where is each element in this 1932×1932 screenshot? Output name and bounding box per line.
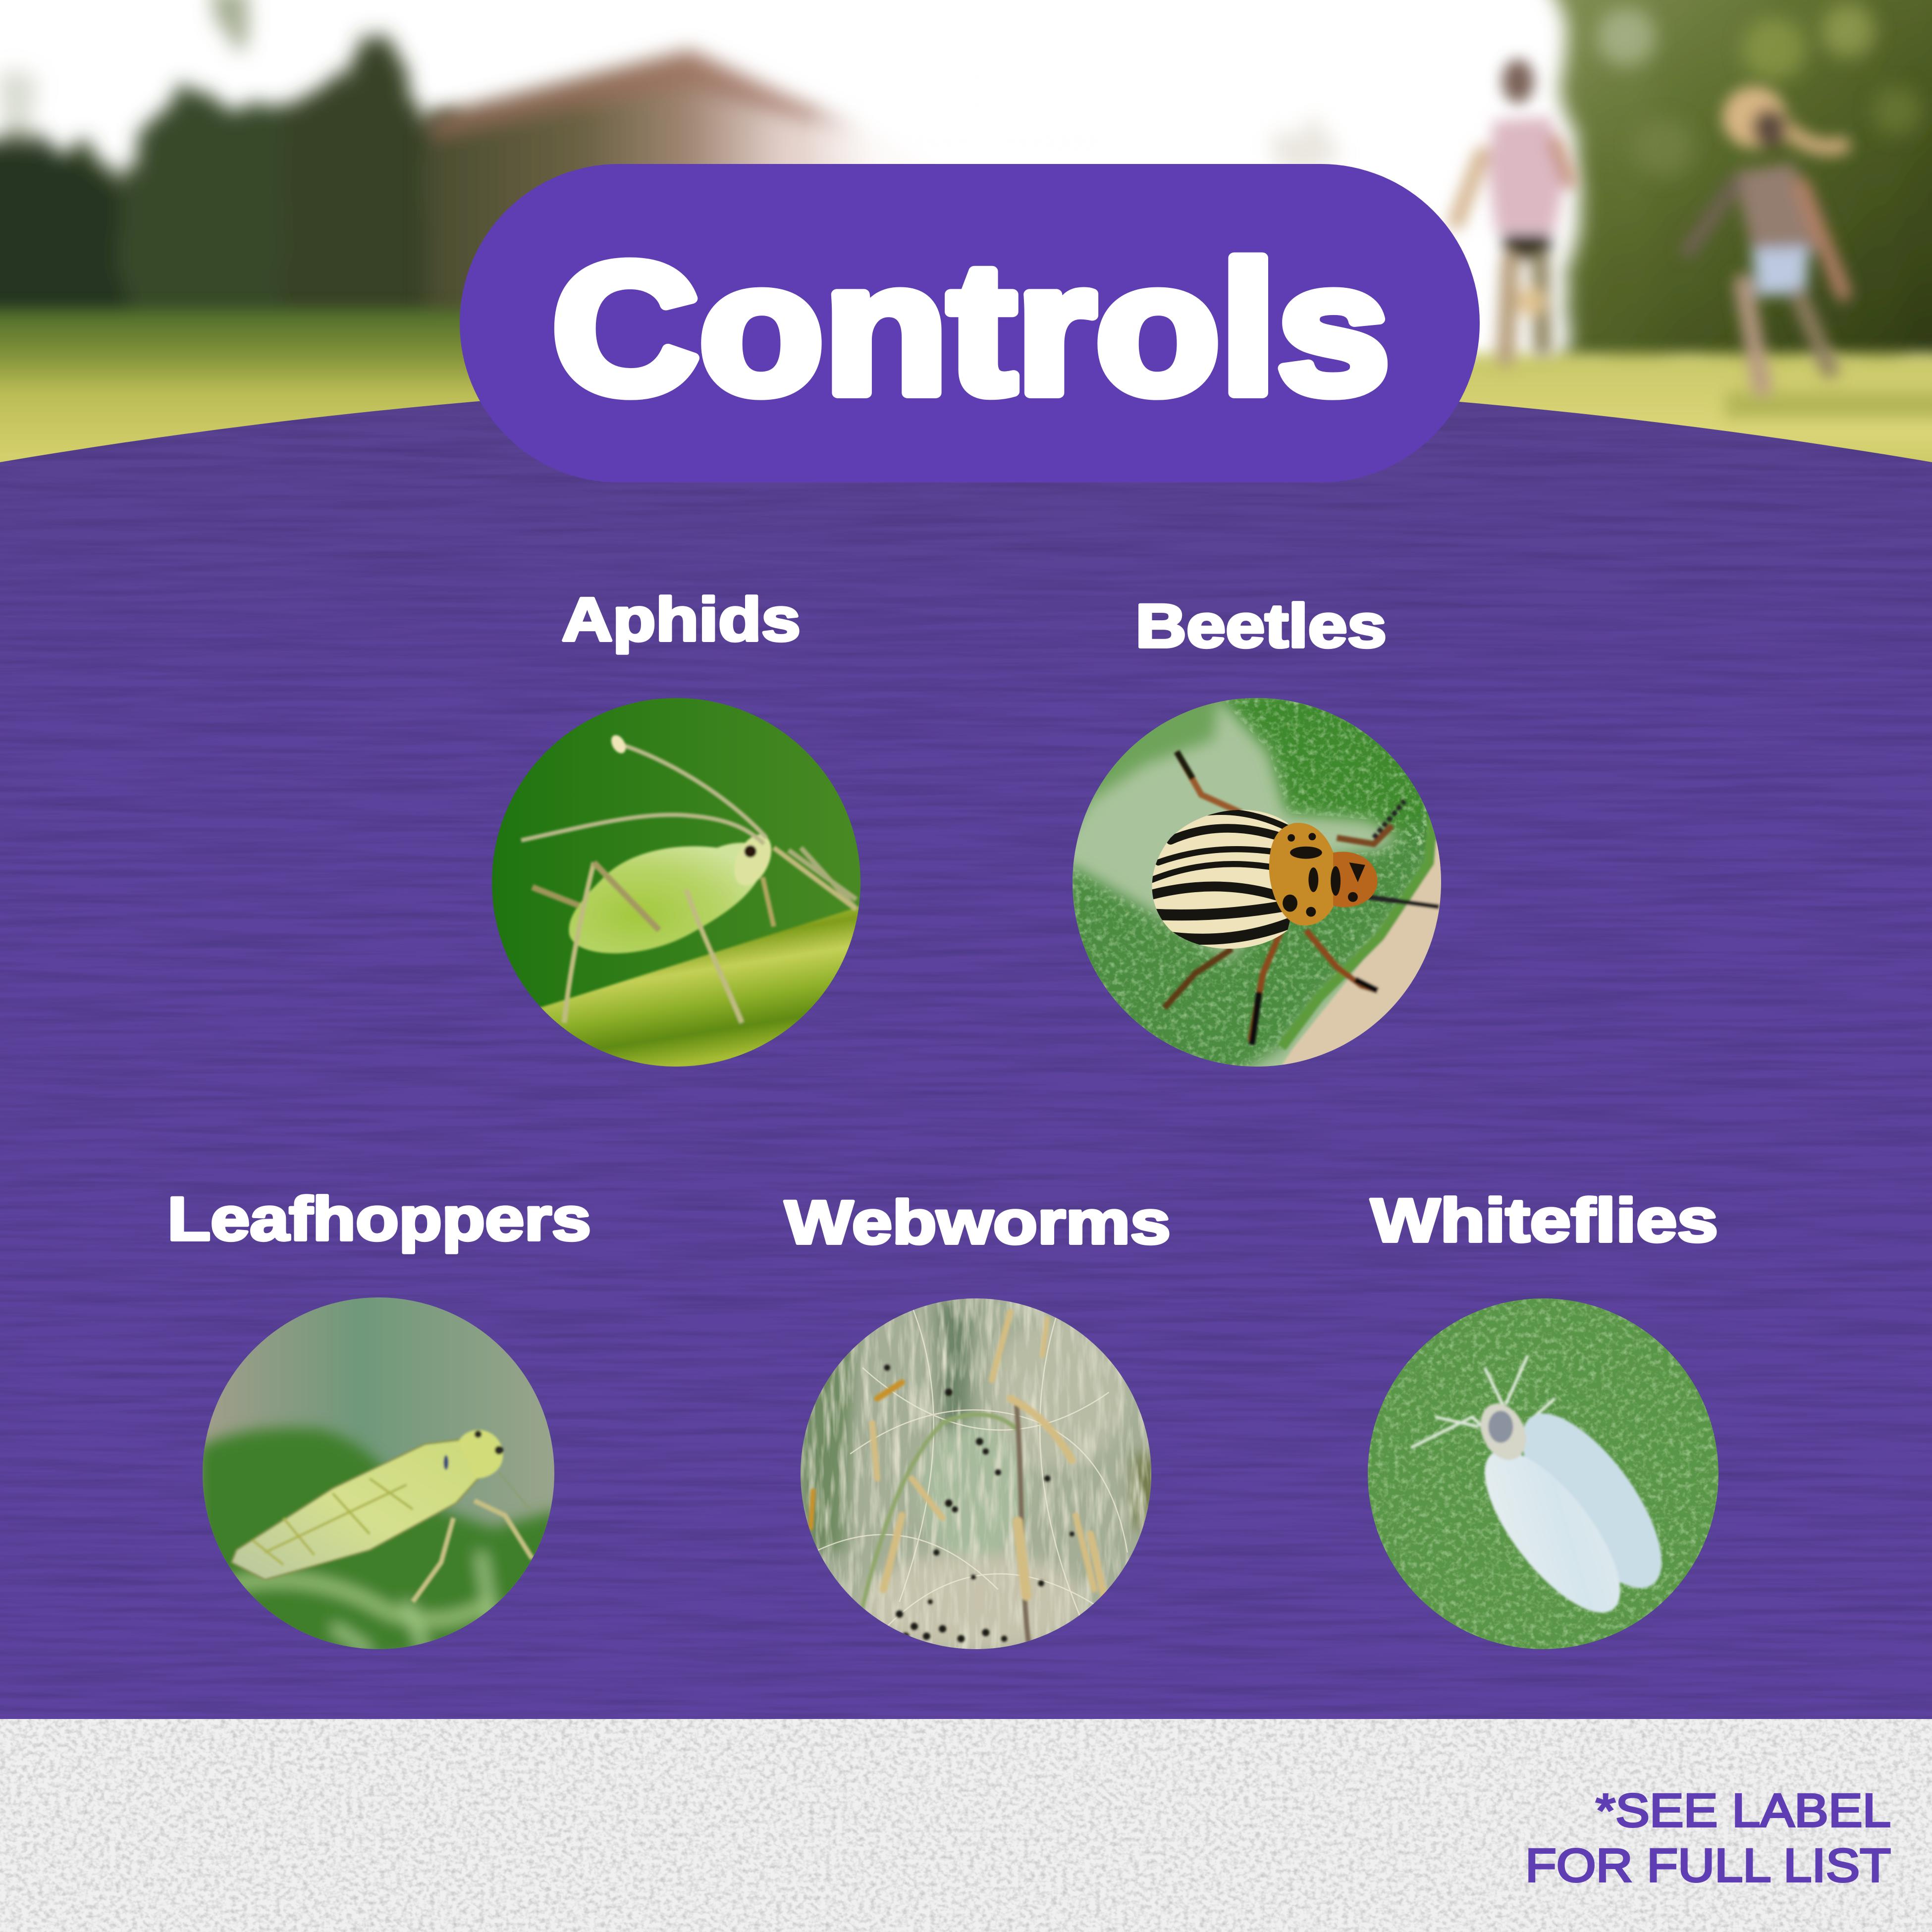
label: Aphids: Aphids [562, 586, 801, 654]
child 2 [1688, 86, 1843, 388]
label: Leafhoppers: Leafhoppers [167, 1185, 591, 1253]
purple wood-textured panel [0, 380, 1932, 1719]
footnote line 1: *SEE LABEL [1596, 1784, 1891, 1837]
label: Whiteflies: Whiteflies [1371, 1186, 1718, 1255]
photo: leafhopper [197, 1294, 561, 1657]
photo: colorado beetle [1073, 698, 1441, 1067]
title pill [460, 164, 1480, 483]
textured white footer band [0, 1719, 1932, 1932]
label: Webworms: Webworms [785, 1188, 1171, 1257]
photo: webworms in web [795, 1294, 1158, 1657]
photo: whitefly [1355, 1294, 1731, 1657]
title: Controls [552, 224, 1390, 432]
photo: aphid [486, 690, 868, 1084]
child 1 [1456, 59, 1570, 357]
footnote text [1525, 1784, 1891, 1892]
footnote line 2: FOR FULL LIST [1525, 1839, 1891, 1892]
background photo: children running in a sunny yard [0, 0, 1932, 511]
label: Beetles: Beetles [1135, 592, 1387, 660]
